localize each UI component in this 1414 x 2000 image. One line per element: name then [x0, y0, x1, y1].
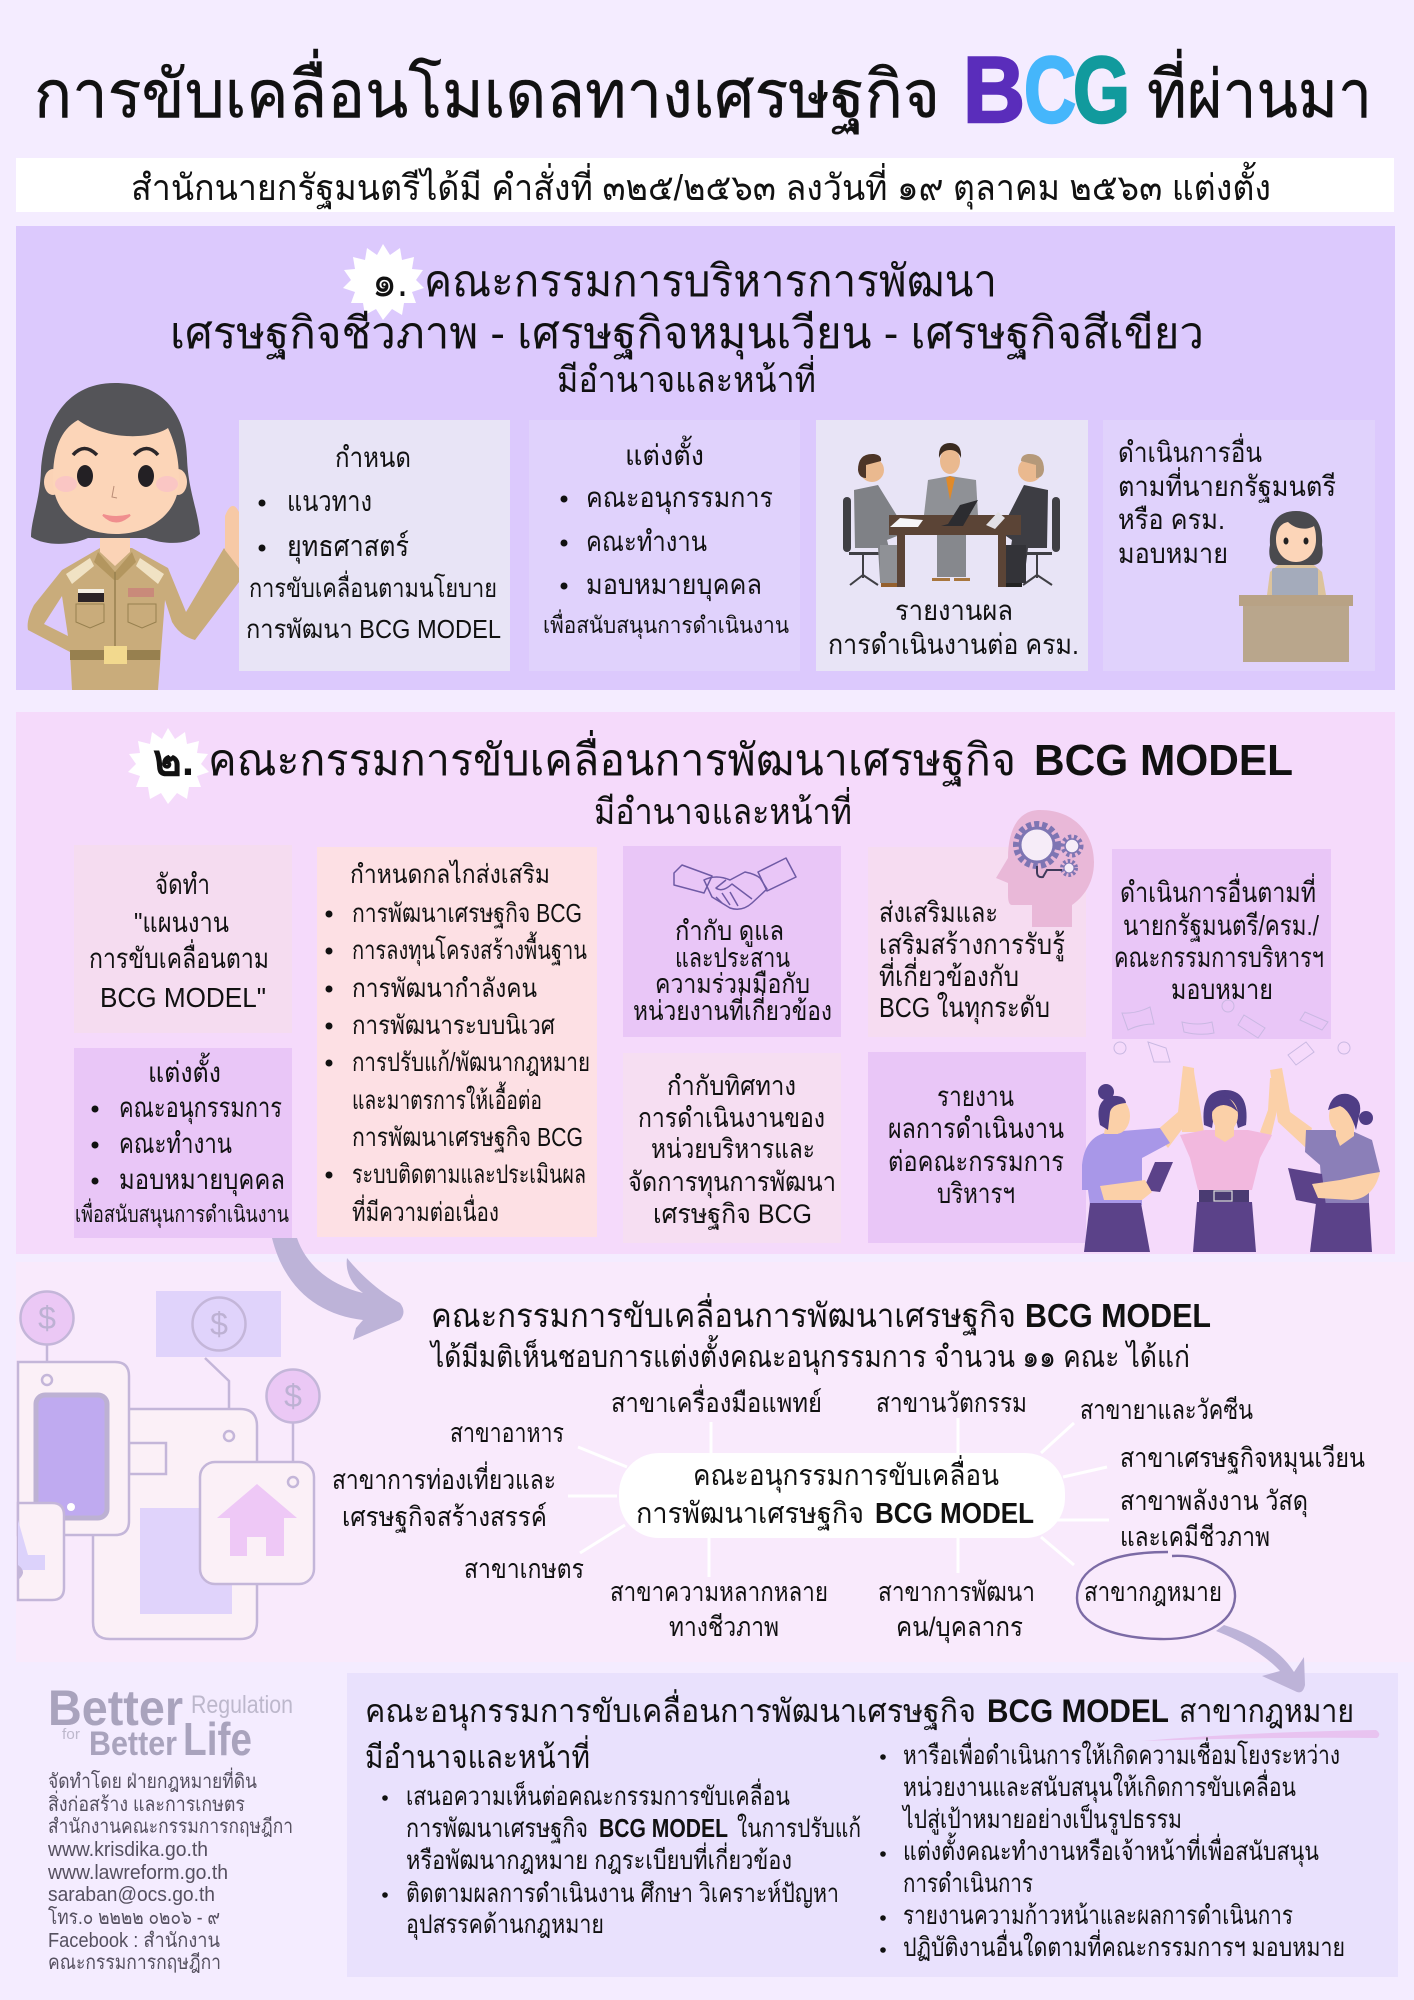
- branch labels: สาขายาและวัคซีน: [1080, 1395, 1253, 1425]
- card: direction: [623, 1053, 841, 1243]
- title: [34, 37, 1372, 142]
- duties list right: แต่งตั้งคณะทำงานหรือเจ้าหน้าที่เพื่อสนับสนุน: [903, 1832, 1319, 1867]
- card: plan: จัดทำ: [155, 869, 210, 900]
- heading: committee 1: [170, 257, 1204, 400]
- heading: subcommittees: ได้มีมติเห็นชอบการแต่งตั้งคณะอนุกรรมการ จำนวน ๑๑ คณะ ได้แก่: [429, 1335, 1190, 1376]
- card: direction: หน่วยบริหารและ: [651, 1134, 815, 1164]
- card: report to cabinet: การดำเนินงานต่อ ครม.: [828, 629, 1079, 660]
- card: other duties: มอบหมาย: [1171, 974, 1273, 1005]
- icon: handshake: [674, 858, 796, 909]
- card: appoint: เพื่อสนับสนุนการดำเนินงาน: [75, 1198, 289, 1228]
- card: appoint: คณะทำงาน: [119, 1128, 232, 1159]
- central hub: คณะอนุกรรมการขับเคลื่อน: [693, 1455, 999, 1493]
- panel: law subcommittee: [347, 1673, 1398, 1977]
- title: B: [963, 37, 1025, 142]
- illustration: digital economy circuits: $: [284, 1378, 302, 1414]
- duties list right: หน่วยงานและสนับสนุนให้เกิดการขับเคลื่อน: [903, 1769, 1296, 1803]
- illustration: falling money: [1114, 1000, 1350, 1065]
- card: other duties: หรือ ครม.: [1118, 504, 1225, 535]
- branch labels: สาขาเศรษฐกิจหมุนเวียน: [1120, 1443, 1365, 1475]
- credits text: สำนักงานคณะกรรมการกฤษฎีกา: [48, 1816, 293, 1838]
- card: appoint: คณะทำงาน: [586, 526, 707, 557]
- card: appoint: คณะอนุกรรมการ: [119, 1092, 282, 1125]
- card: report: ผลการดำเนินงาน: [888, 1113, 1064, 1144]
- duties list left: [382, 1778, 861, 1940]
- credits text: [47, 1767, 293, 1974]
- card: other duties: [1103, 420, 1375, 671]
- central hub: การพัฒนาเศรษฐกิจ: [636, 1498, 864, 1531]
- spokes: [568, 1418, 1109, 1577]
- title: การขับเคลื่อนโมเดลทางเศรษฐกิจ: [34, 49, 940, 134]
- card: incentive mechanisms: การพัฒนาระบบนิเวศ: [352, 1010, 555, 1040]
- duties list left: BCG MODEL: [599, 1813, 728, 1843]
- duties list right: รายงานความก้าวหน้าและผลการดำเนินการ: [903, 1900, 1293, 1930]
- branch labels: สาขาพลังงาน วัสดุ: [1120, 1486, 1308, 1518]
- card: other duties: [1112, 849, 1331, 1039]
- credits text: www.lawreform.go.th: [47, 1862, 228, 1884]
- badge: number 1 starburst: ๑.: [372, 257, 408, 306]
- logo: Better Regulation for Better Life: Regulation: [191, 1691, 293, 1719]
- card: incentive mechanisms: [317, 847, 597, 1237]
- panel: committee 1: [16, 226, 1395, 690]
- card: promote awareness: BCG ในทุกระดับ: [879, 991, 1050, 1025]
- duties list left: อุปสรรคด้านกฎหมาย: [406, 1909, 604, 1940]
- card: supervise and coordinate: [623, 846, 841, 1037]
- card: direction: จัดการทุนการพัฒนา: [628, 1167, 836, 1199]
- card: define: การพัฒนา BCG MODEL: [246, 614, 501, 644]
- central hub: [619, 1453, 1065, 1538]
- heading: committee 1: มีอำนาจและหน้าที่: [557, 355, 816, 400]
- card: incentive mechanisms: การลงทุนโครงสร้างพื้นฐาน: [352, 931, 587, 966]
- card: direction: เศรษฐกิจ BCG: [653, 1199, 812, 1230]
- card: promote awareness: [868, 810, 1094, 1037]
- card: promote awareness: เสริมสร้างการรับรู้: [879, 929, 1065, 962]
- credits text: สิ่งก่อสร้าง และการเกษตร: [48, 1790, 245, 1816]
- branch labels: [332, 1384, 1365, 1644]
- badge: number 2 starburst: [128, 728, 209, 804]
- card: report: ต่อคณะกรรมการ: [888, 1146, 1064, 1177]
- duties list left: การพัฒนาเศรษฐกิจ: [406, 1813, 588, 1844]
- logo: Better Regulation for Better Life: Better: [48, 1680, 183, 1736]
- subtitle bar: สำนักนายกรัฐมนตรีได้มี คำสั่งที่ ๓๒๕/๒๕๖๓ ลงวันที่ ๑๙ ตุลาคม ๒๕๖๓ แต่งตั้ง: [131, 161, 1271, 210]
- card: supervise and coordinate: และประสาน: [675, 943, 790, 973]
- card: plan: "แผนงาน: [134, 907, 229, 938]
- icon: head with gears: [996, 810, 1094, 927]
- card: appoint: มอบหมายบุคคล: [586, 569, 762, 602]
- duties list right: [880, 1737, 1345, 1962]
- card: incentive mechanisms: การปรับแก้/พัฒนากฎหมาย: [352, 1047, 590, 1077]
- card: report: บริหารฯ: [937, 1178, 1015, 1209]
- card: other duties: ตามที่นายกรัฐมนตรี: [1118, 467, 1336, 503]
- branch labels: สาขาการท่องเที่ยวและ: [332, 1461, 556, 1495]
- illustration: officer woman: [28, 383, 239, 690]
- card: appoint: แต่งตั้ง: [625, 435, 704, 471]
- card: define: แนวทาง: [287, 486, 372, 518]
- branch labels: และเคมีชีวภาพ: [1120, 1522, 1270, 1552]
- card: plan: การขับเคลื่อนตาม: [89, 939, 269, 974]
- panel: subcommittees background: [16, 1262, 1414, 1662]
- card: promote awareness: ที่เกี่ยวข้องกับ: [879, 957, 1019, 992]
- card: appoint: คณะอนุกรรมการ: [586, 482, 773, 515]
- illustration: meeting: [843, 443, 1060, 587]
- logo: Better Regulation for Better Life: [48, 1680, 293, 1765]
- card: plan: BCG MODEL": [100, 982, 266, 1013]
- branch labels: สาขากฎหมาย: [1084, 1577, 1222, 1607]
- illustration: woman at desk: [1239, 511, 1353, 662]
- card: supervise and coordinate: หน่วยงานที่เกี่ยวข้อง: [633, 992, 832, 1026]
- card: appoint: [74, 1048, 292, 1238]
- heading: committee 2: [208, 729, 1293, 832]
- card: supervise and coordinate: กำกับ ดูแล: [675, 916, 784, 947]
- heading: subcommittees: [429, 1293, 1211, 1376]
- credits text: โทร.๐ ๒๒๒๒ ๐๒๐๖ - ๙: [48, 1906, 220, 1929]
- card: direction: การดำเนินงานของ: [638, 1103, 825, 1133]
- card: plan: [74, 845, 292, 1033]
- card: other duties: ดำเนินการอื่น: [1118, 433, 1262, 468]
- logo: Better Regulation for Better Life: Life: [183, 1713, 252, 1765]
- badge: number 1 starburst: [343, 244, 424, 320]
- card: define: [239, 420, 510, 671]
- card: other duties: นายกรัฐมนตรี/ครม./: [1123, 910, 1319, 942]
- branch labels: สาขาความหลากหลาย: [610, 1577, 828, 1607]
- heading: committee 2: BCG MODEL: [1034, 736, 1293, 785]
- card: incentive mechanisms: ที่มีความต่อเนื่อง: [352, 1194, 499, 1227]
- central hub: BCG MODEL: [875, 1498, 1034, 1530]
- card: incentive mechanisms: และมาตรการให้เอื้อต่อ: [352, 1081, 542, 1115]
- card: incentive mechanisms: กำหนดกลไกส่งเสริม: [350, 859, 550, 889]
- illustration: digital economy circuits: $: [38, 1300, 56, 1336]
- title: ที่ผ่านมา: [1147, 49, 1372, 131]
- illustration: digital economy circuits: [18, 1291, 320, 1639]
- duties list right: การดำเนินการ: [903, 1868, 1033, 1898]
- credits text: จัดทำโดย ฝ่ายกฎหมายที่ดิน: [48, 1767, 257, 1793]
- heading: law subcommittee: สาขากฎหมาย: [1179, 1693, 1354, 1729]
- credits text: Facebook : สำนักงาน: [48, 1930, 220, 1952]
- illustration: three women high-five: [1082, 1066, 1380, 1252]
- card: report: [868, 1052, 1086, 1243]
- card: report: รายงาน: [937, 1081, 1014, 1112]
- card: other duties: มอบหมาย: [1118, 538, 1228, 569]
- credits text: www.krisdika.go.th: [47, 1839, 208, 1861]
- card: other duties: คณะกรรมการบริหารฯ: [1114, 942, 1324, 973]
- duties list right: ไปสู่เป้าหมายอย่างเป็นรูปธรรม: [901, 1803, 1182, 1835]
- heading: committee 1: คณะกรรมการบริหารการพัฒนา: [424, 257, 997, 306]
- subtitle bar: [16, 158, 1394, 212]
- brush underline: [1141, 1730, 1379, 1741]
- title: G: [1073, 37, 1130, 142]
- card: direction: กำกับทิศทาง: [667, 1071, 796, 1101]
- branch labels: สาขาเกษตร: [464, 1554, 584, 1584]
- duties list left: ติดตามผลการดำเนินงาน ศึกษา วิเคราะห์ปัญหา: [406, 1878, 839, 1908]
- card: appoint: [529, 420, 800, 671]
- card: incentive mechanisms: การพัฒนาเศรษฐกิจ BCG: [352, 1122, 583, 1153]
- logo: Better Regulation for Better Life: for: [62, 1726, 80, 1743]
- card: promote awareness: ส่งเสริมและ: [879, 897, 998, 928]
- branch labels: สาขาอาหาร: [450, 1418, 564, 1448]
- heading: subcommittees: คณะกรรมการขับเคลื่อนการพัฒนาเศรษฐกิจ: [431, 1293, 1016, 1336]
- card: incentive mechanisms: การพัฒนากำลังคน: [352, 973, 537, 1003]
- card: define: กำหนด: [335, 442, 411, 473]
- title: C: [1024, 37, 1076, 142]
- illustration: digital economy circuits: $: [210, 1306, 228, 1342]
- heading: committee 1: เศรษฐกิจชีวภาพ - เศรษฐกิจหมุนเวียน - เศรษฐกิจสีเขียว: [170, 309, 1204, 360]
- branch labels: คน/บุคลากร: [896, 1612, 1023, 1644]
- card: other duties: ดำเนินการอื่นตามที่: [1120, 873, 1316, 908]
- branch labels: เศรษฐกิจสร้างสรรค์: [342, 1501, 547, 1533]
- heading: law subcommittee: คณะอนุกรรมการขับเคลื่อนการพัฒนาเศรษฐกิจ: [365, 1689, 976, 1731]
- card: appoint: มอบหมายบุคคล: [119, 1164, 285, 1197]
- credits text: saraban@ocs.go.th: [48, 1884, 215, 1906]
- card: define: ยุทธศาสตร์: [287, 530, 409, 564]
- card: report to cabinet: รายงานผล: [895, 595, 1013, 626]
- arrow: committee 2 to subcommittees: [272, 1238, 404, 1340]
- heading: law subcommittee: BCG MODEL: [987, 1693, 1169, 1729]
- card: define: การขับเคลื่อนตามนโยบาย: [249, 570, 497, 603]
- heading: law subcommittee: มีอำนาจและหน้าที่: [365, 1735, 590, 1775]
- logo: Better Regulation for Better Life: Better: [89, 1725, 177, 1763]
- duties list left: เสนอความเห็นต่อคณะกรรมการขับเคลื่อน: [406, 1778, 790, 1811]
- duties list left: ในการปรับแก้: [737, 1813, 861, 1843]
- badge: number 2 starburst: ๒.: [153, 736, 194, 785]
- heading: subcommittees: BCG MODEL: [1025, 1297, 1211, 1334]
- branch labels: ทางชีวภาพ: [669, 1612, 779, 1642]
- heading: law subcommittee: [365, 1689, 1354, 1775]
- circle around law branch: [1077, 1552, 1235, 1639]
- card: report to cabinet: [816, 420, 1088, 671]
- card: supervise and coordinate: ความร่วมมือกับ: [655, 969, 810, 999]
- credits text: คณะกรรมการกฤษฎีกา: [48, 1952, 221, 1974]
- duties list left: หรือพัฒนากฎหมาย กฎระเบียบที่เกี่ยวข้อง: [406, 1842, 792, 1875]
- card: incentive mechanisms: การพัฒนาเศรษฐกิจ BCG: [352, 898, 582, 929]
- heading: committee 2: มีอำนาจและหน้าที่: [594, 787, 852, 832]
- branch labels: สาขาเครื่องมือแพทย์: [611, 1384, 822, 1418]
- panel: committee 2: [16, 712, 1395, 1254]
- diagram: 11 subcommittee branches: [332, 1384, 1365, 1644]
- branch labels: สาขานวัตกรรม: [876, 1388, 1027, 1418]
- heading: committee 2: คณะกรรมการขับเคลื่อนการพัฒนาเศรษฐกิจ: [208, 729, 1016, 786]
- card: appoint: แต่งตั้ง: [148, 1052, 221, 1088]
- card: incentive mechanisms: ระบบติดตามและประเมินผล: [352, 1159, 586, 1189]
- card: appoint: เพื่อสนับสนุนการดำเนินงาน: [543, 609, 789, 639]
- branch labels: สาขาการพัฒนา: [878, 1577, 1035, 1607]
- arrow: law branch to law panel: [1216, 1625, 1305, 1692]
